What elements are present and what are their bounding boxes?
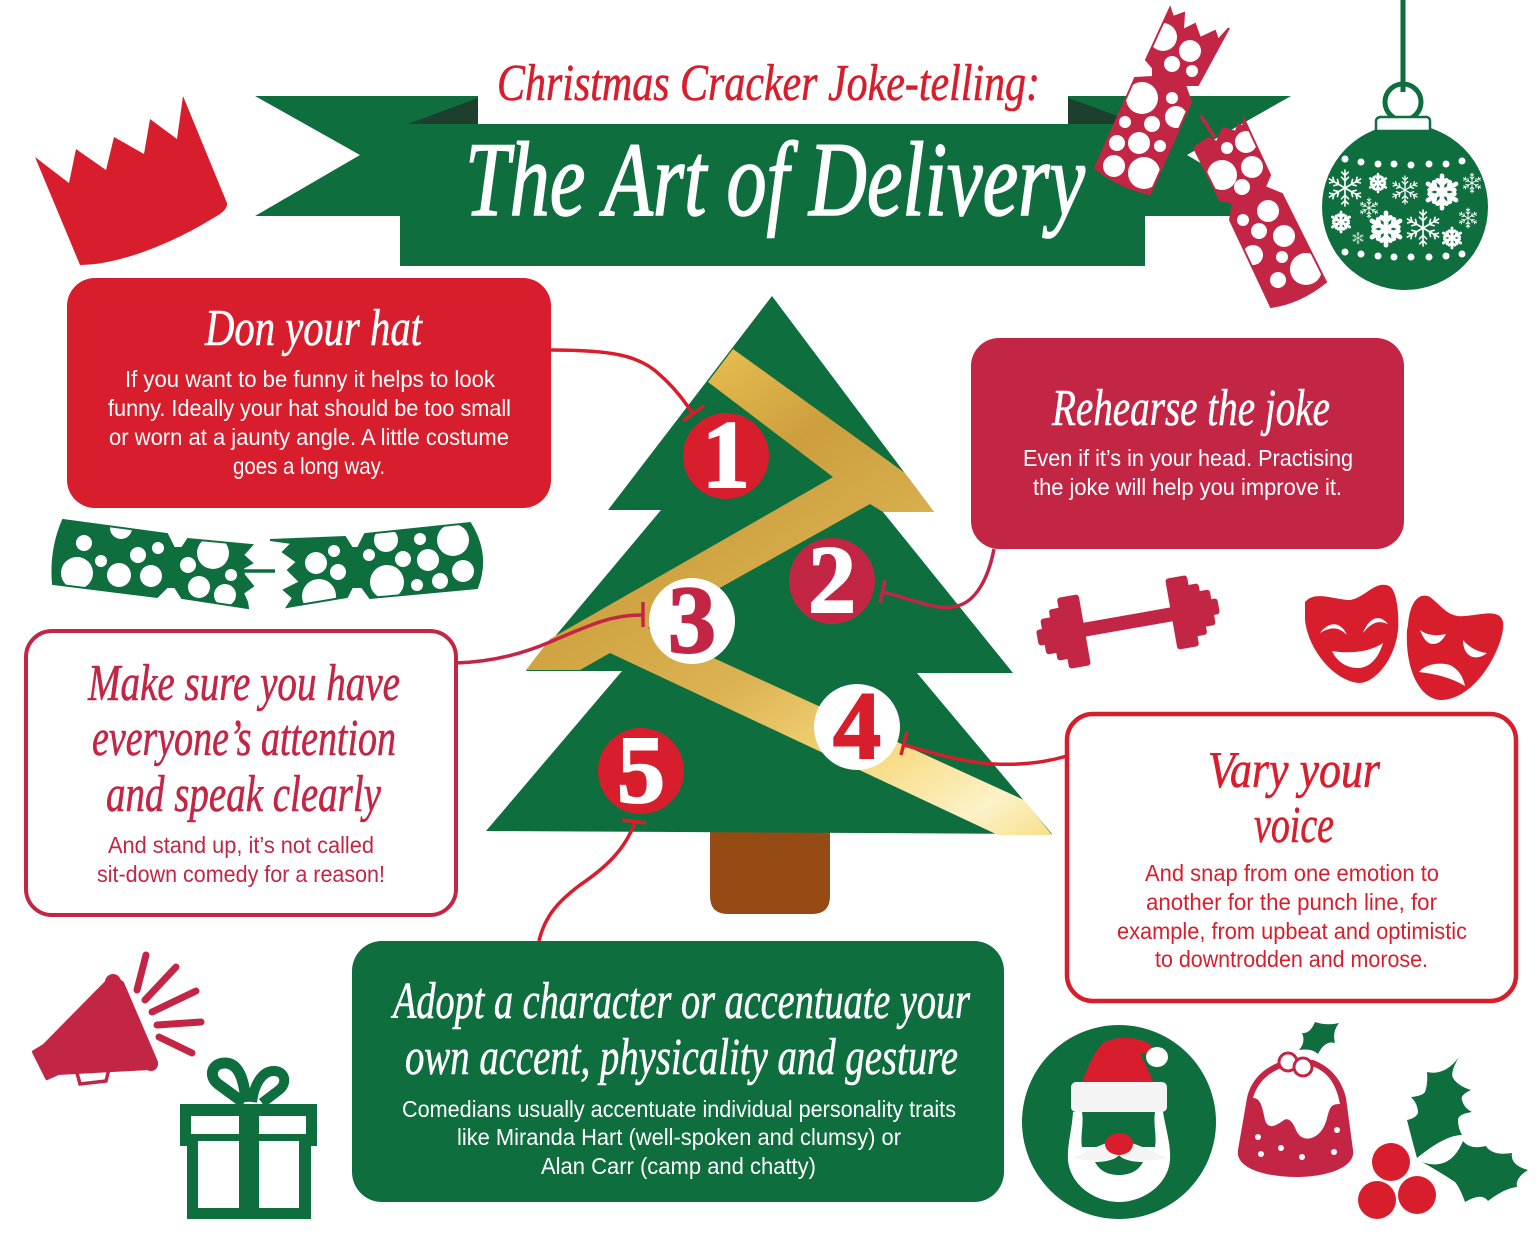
connector 1 xyxy=(551,350,704,421)
icon: dumbbell xyxy=(1031,571,1225,673)
title line: Christmas Cracker Joke-telling: Christmas Cracker Joke-telling: xyxy=(497,55,1040,112)
body text: Even if it’s in your head. Practising xyxy=(1023,445,1353,471)
body text: And stand up, it’s not called xyxy=(108,832,374,858)
heading xyxy=(1208,742,1381,854)
number 2 badge xyxy=(789,526,875,633)
icon: green cracker right half xyxy=(270,523,482,613)
body text: And snap from one emotion to xyxy=(1145,860,1439,886)
main title: The Art of Delivery: The Art of Delivery xyxy=(465,121,1086,238)
panel: rehearse the joke xyxy=(971,338,1404,549)
number 5 badge: 5 xyxy=(617,716,665,823)
heading: own accent, physicality and gesture xyxy=(405,1029,958,1086)
body text: like Miranda Hart (well-spoken and clumsy) or xyxy=(457,1124,901,1150)
number 1 badge: 1 xyxy=(702,401,750,508)
icon: green cracker left half xyxy=(52,517,275,608)
body text: another for the punch line, for xyxy=(1146,889,1437,915)
body text: If you want to be funny it helps to look xyxy=(125,366,495,392)
panel: attention and speak clearly xyxy=(26,631,456,915)
icon: megaphone xyxy=(34,955,201,1084)
icon: red cracker left half xyxy=(1095,8,1229,194)
heading: Make sure you have xyxy=(87,655,400,712)
number 3 badge: 3 xyxy=(668,566,716,673)
body text xyxy=(108,366,511,479)
heading: Don your hat xyxy=(204,300,423,357)
connector 2 xyxy=(880,549,994,608)
body text: the joke will help you improve it. xyxy=(1033,474,1342,500)
body text: example, from upbeat and optimistic xyxy=(1117,918,1467,944)
heading: voice xyxy=(1254,797,1334,854)
tree foliage xyxy=(486,296,1052,834)
icon: hanging bauble xyxy=(1322,0,1488,290)
icon: tragedy mask xyxy=(1407,596,1503,700)
body text xyxy=(97,832,385,887)
connector 4 xyxy=(901,731,1067,764)
number 4 badge xyxy=(814,672,900,779)
icon: gift box xyxy=(180,1063,317,1219)
heading: Rehearse the joke xyxy=(1051,380,1330,437)
heading xyxy=(87,655,400,823)
icon: christmas pudding xyxy=(1238,1022,1353,1177)
body text: to downtrodden and morose. xyxy=(1155,946,1428,972)
tree trunk xyxy=(710,830,830,914)
icon: red cracker right half xyxy=(1194,116,1326,307)
number 1 badge xyxy=(683,401,769,508)
number 3 badge xyxy=(649,566,735,673)
body text: sit-down comedy for a reason! xyxy=(97,861,385,887)
number 5 badge xyxy=(598,716,684,823)
icon: party crown xyxy=(35,96,227,265)
body text xyxy=(1117,860,1467,972)
number 4 badge: 4 xyxy=(833,672,881,779)
number 2 badge: 2 xyxy=(808,526,856,633)
icon: santa xyxy=(1022,1025,1216,1219)
body text: Alan Carr (camp and chatty) xyxy=(541,1153,816,1179)
heading xyxy=(391,973,971,1086)
body text: funny. Ideally your hat should be too small xyxy=(108,395,511,421)
title banner ribbon xyxy=(255,96,1291,266)
icon: comedy mask xyxy=(1305,585,1398,683)
heading: Adopt a character or accentuate your xyxy=(391,973,971,1030)
gold ribbon xyxy=(526,349,1052,835)
connector 5 xyxy=(539,820,646,941)
body text xyxy=(1023,445,1353,500)
body text: goes a long way. xyxy=(233,453,385,479)
heading: Vary your xyxy=(1208,742,1381,799)
heading: everyone’s attention xyxy=(92,710,396,767)
panel: vary your voice xyxy=(1067,714,1516,1001)
heading: and speak clearly xyxy=(106,766,382,823)
panel: adopt a character xyxy=(352,941,1004,1202)
panel: don your hat xyxy=(67,278,551,508)
body text xyxy=(402,1096,956,1179)
icon: holly xyxy=(1358,1057,1528,1219)
christmas tree xyxy=(486,296,1052,914)
body text: Comedians usually accentuate individual personality traits xyxy=(402,1096,956,1122)
body text: or worn at a jaunty angle. A little costume xyxy=(109,424,509,450)
connector 3 xyxy=(456,602,643,663)
